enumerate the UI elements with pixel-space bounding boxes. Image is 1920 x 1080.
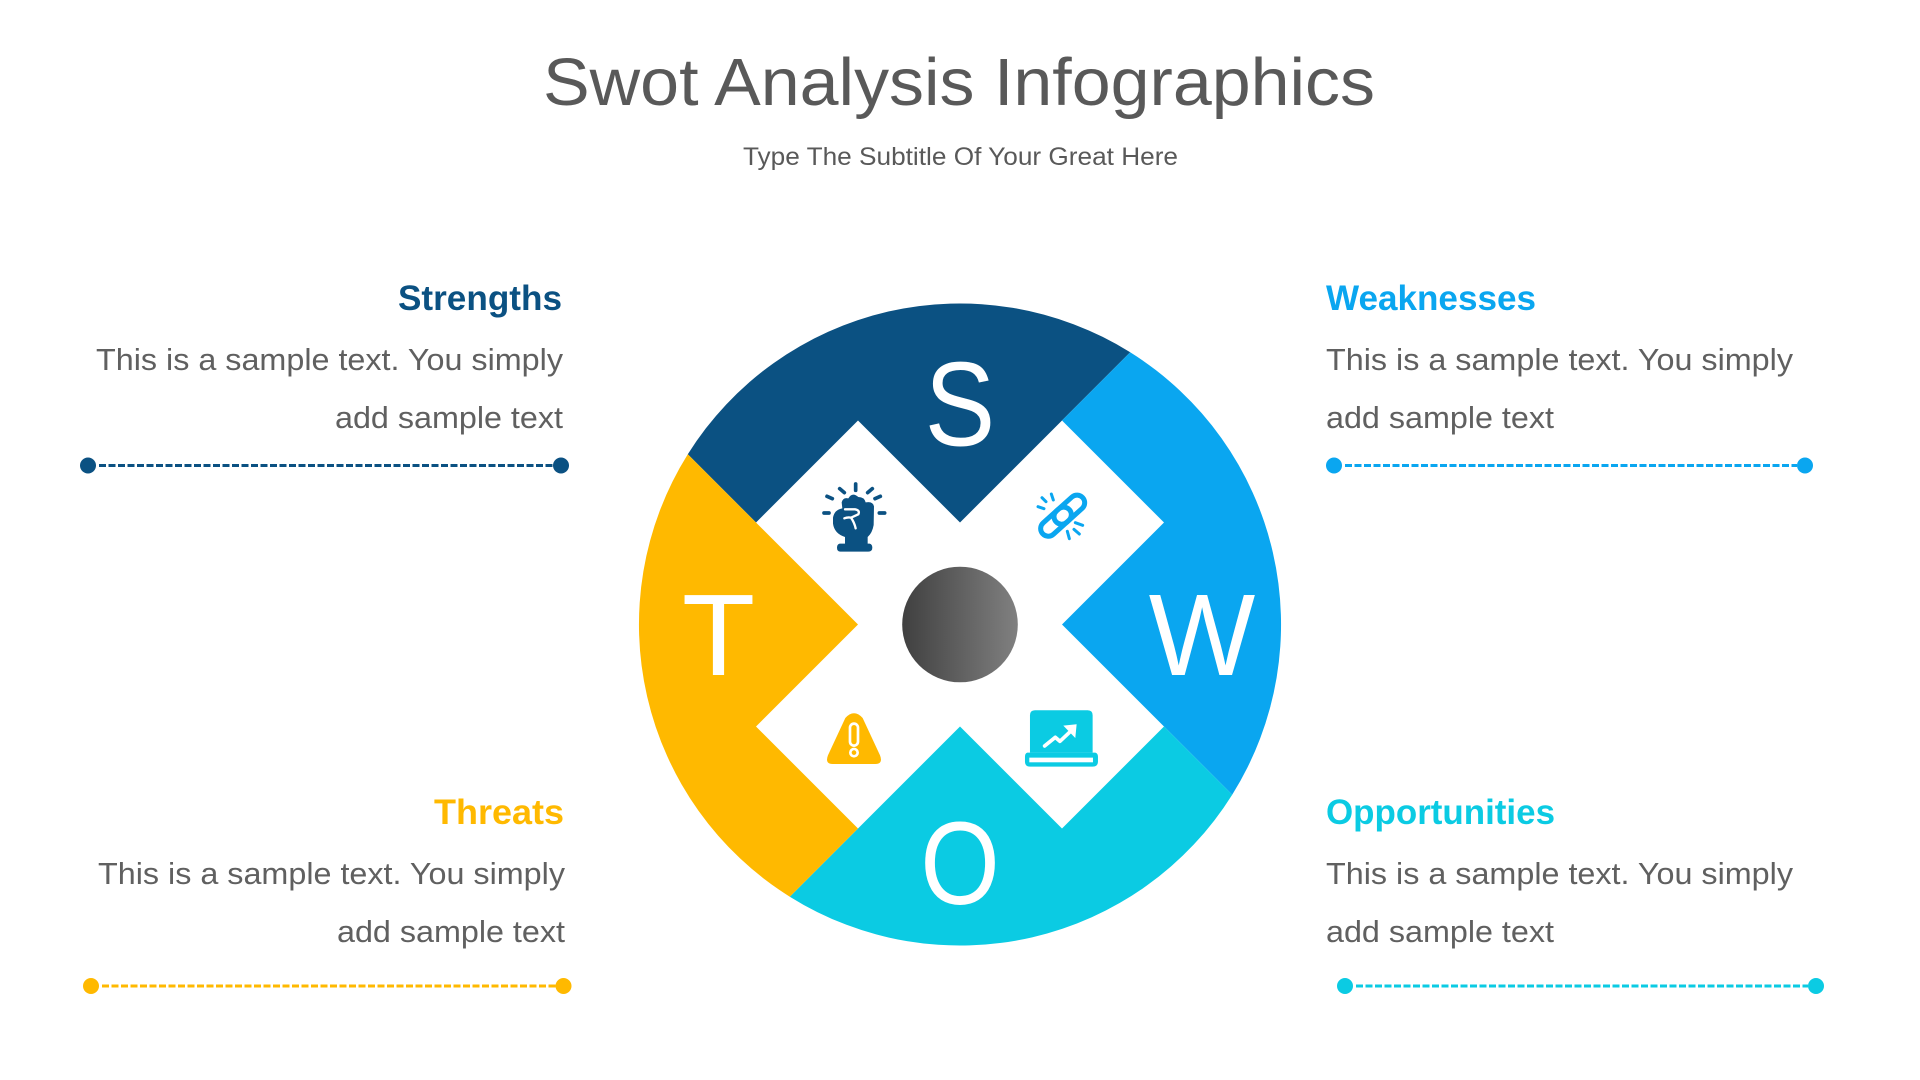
title: Swot Analysis Infographics [543,45,1375,120]
text: threats body: This is a sample text. You simply [98,856,566,891]
icon: raised fist [824,484,885,552]
icon: broken chain link [1037,492,1088,539]
letter O: O [920,798,1000,930]
subtitle: Type The Subtitle Of Your Great Here [743,143,1178,171]
heading: strengths: Strengths [398,279,562,318]
panel: weaknesses [1326,279,1813,474]
dashed connector: opportunities [1337,978,1824,994]
heading: threats: Threats [434,793,564,832]
text: threats body: add sample text [337,914,565,949]
segment: T [639,454,858,897]
dashed connector: threats [83,978,572,994]
text: weaknesses body: add sample text [1326,400,1554,435]
icon: warning triangle [827,713,881,764]
text: opportunities body: add sample text [1326,914,1554,949]
letter T: T [682,571,755,701]
heading: opportunities: Opportunities [1326,793,1555,832]
text: strengths body: This is a sample text. You simply [96,342,564,377]
text: weaknesses body: This is a sample text. You simply [1326,342,1794,377]
text: threats body [98,856,566,949]
text: strengths body [96,342,564,435]
text: opportunities body: This is a sample text. You simply [1326,856,1794,891]
heading: weaknesses: Weaknesses [1326,279,1536,318]
SWOT wheel [639,303,1281,946]
panel: threats [83,793,572,994]
segment: W [1062,352,1281,795]
text: opportunities body [1326,856,1794,949]
icon: laptop with rising chart [1025,710,1098,767]
panel: strengths [80,279,569,474]
center circle [902,567,1018,682]
dashed connector: weaknesses [1326,458,1813,474]
dashed connector: strengths [80,458,569,474]
letter W: W [1149,570,1255,700]
text: strengths body: add sample text [335,400,563,435]
text: weaknesses body [1326,342,1794,435]
segment: S [688,303,1130,522]
panel: opportunities [1326,793,1824,994]
letter S: S [925,337,995,471]
segment: O [790,726,1232,946]
